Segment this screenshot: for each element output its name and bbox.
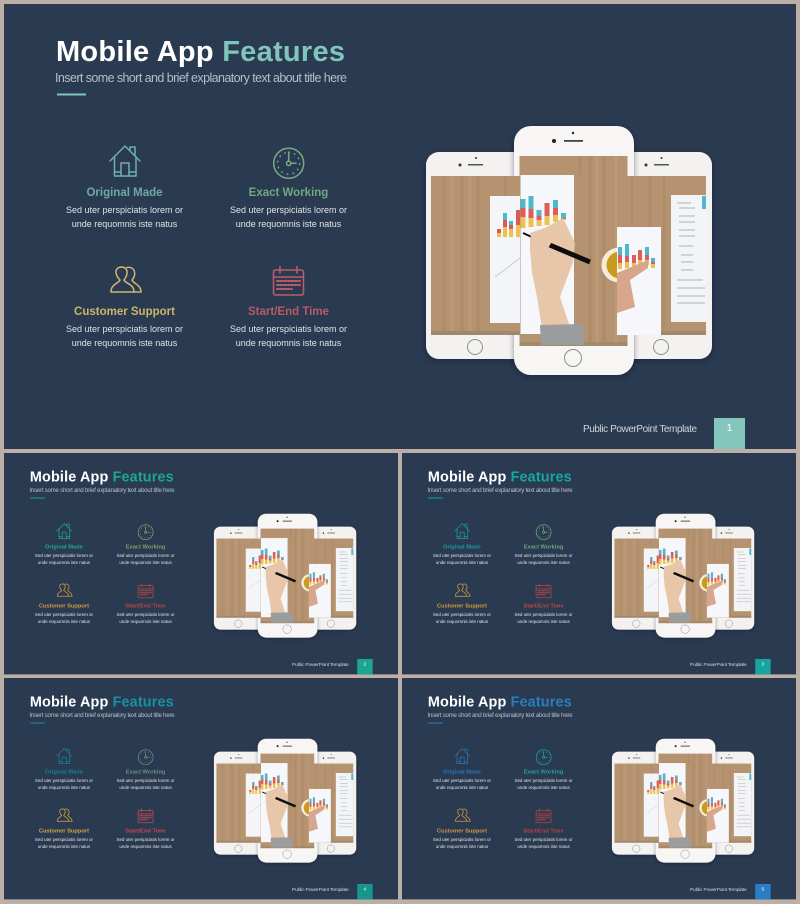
heading: Customer Support xyxy=(74,306,175,318)
description: Sed uter perspiciatis lorem or xyxy=(514,778,573,783)
feature: Start/End Time xyxy=(230,266,347,348)
icon: clock xyxy=(138,750,153,765)
slide 2 xyxy=(4,453,398,674)
page number badge: 4 xyxy=(364,886,367,892)
phone mockups xyxy=(612,514,754,638)
description: Sed uter perspiciatis lorem or xyxy=(116,837,175,842)
feature: Start/End Time xyxy=(514,584,573,624)
heading: Original Made xyxy=(86,187,163,199)
slide 1: main slide xyxy=(4,4,796,449)
footer label: Public PowerPoint Template xyxy=(292,662,349,668)
icon: clock xyxy=(536,525,551,540)
heading: Start/End Time xyxy=(248,306,329,318)
title underline xyxy=(30,722,45,725)
heading: Exact Working xyxy=(249,187,328,199)
description: Sed uter perspiciatis lorem or xyxy=(116,778,175,783)
feature: Original Made xyxy=(35,749,94,790)
description: Sed uter perspiciatis lorem or xyxy=(433,837,492,842)
page number badge xyxy=(755,884,771,899)
description: Sed uter perspiciatis lorem or xyxy=(230,205,347,215)
icon: people xyxy=(111,267,141,292)
description: Sed uter perspiciatis lorem or xyxy=(230,324,347,334)
description: Sed uter perspiciatis lorem or xyxy=(66,324,183,334)
description: unde requomnis iste natus xyxy=(236,219,342,229)
description: unde requomnis iste natus xyxy=(38,785,91,790)
icon: house xyxy=(57,524,72,539)
page number badge xyxy=(755,659,771,674)
heading: Customer Support xyxy=(437,604,487,610)
heading: Original Made xyxy=(45,545,83,551)
description: unde requomnis iste natus xyxy=(517,560,571,565)
description: Sed uter perspiciatis lorem or xyxy=(35,837,94,842)
feature: Customer Support xyxy=(433,584,492,624)
icon: clock xyxy=(536,750,551,765)
heading: Start/End Time xyxy=(125,829,166,835)
feature: Exact Working xyxy=(230,148,347,229)
footer label: Public PowerPoint Template xyxy=(292,887,349,893)
footer label: Public PowerPoint Template xyxy=(583,424,697,435)
description: Sed uter perspiciatis lorem or xyxy=(514,553,573,558)
description: unde requomnis iste natus xyxy=(436,619,489,624)
heading: Exact Working xyxy=(126,770,166,776)
feature: Customer Support xyxy=(66,267,183,348)
title: Mobile App Features xyxy=(428,694,572,710)
icon: people xyxy=(455,809,470,821)
page number badge xyxy=(714,418,745,449)
description: Sed uter perspiciatis lorem or xyxy=(514,612,573,617)
title underline xyxy=(428,497,443,500)
heading: Customer Support xyxy=(39,829,89,835)
icon: people xyxy=(455,584,470,596)
subtitle: Insert some short and brief explanatory text about title here xyxy=(427,712,573,719)
description: Sed uter perspiciatis lorem or xyxy=(66,205,183,215)
description: unde requomnis iste natus xyxy=(72,219,178,229)
heading: Start/End Time xyxy=(523,829,564,835)
page number badge: 2 xyxy=(364,661,367,667)
heading: Exact Working xyxy=(126,545,166,551)
feature: Exact Working xyxy=(116,525,175,565)
subtitle: Insert some short and brief explanatory text about title here xyxy=(55,71,347,85)
heading: Original Made xyxy=(45,770,83,776)
description: unde requomnis iste natus xyxy=(436,560,489,565)
feature: Start/End Time xyxy=(116,809,175,849)
title underline xyxy=(57,94,86,96)
icon: house xyxy=(455,524,470,539)
description: unde requomnis iste natus xyxy=(236,338,342,348)
phone mockups xyxy=(214,739,356,863)
feature: Start/End Time xyxy=(514,809,573,849)
icon: calendar xyxy=(274,266,304,295)
icon: clock xyxy=(274,148,304,178)
heading: Original Made xyxy=(443,545,481,551)
heading: Exact Working xyxy=(524,545,564,551)
description: unde requomnis iste natus xyxy=(119,619,173,624)
description: unde requomnis iste natus xyxy=(436,785,489,790)
subtitle: Insert some short and brief explanatory text about title here xyxy=(29,487,175,494)
icon: people xyxy=(57,584,72,596)
description: unde requomnis iste natus xyxy=(119,560,173,565)
footer label: Public PowerPoint Template xyxy=(690,887,747,893)
page number badge: 5 xyxy=(762,886,765,892)
icon: calendar xyxy=(536,584,551,598)
description: unde requomnis iste natus xyxy=(38,619,91,624)
title: Mobile App Features xyxy=(30,694,174,710)
page number badge: 3 xyxy=(762,661,765,667)
heading: Customer Support xyxy=(39,604,89,610)
feature: Start/End Time xyxy=(116,584,175,624)
description: unde requomnis iste natus xyxy=(517,844,571,849)
heading: Original Made xyxy=(443,770,481,776)
page number badge: 1 xyxy=(727,423,733,434)
heading: Customer Support xyxy=(437,829,487,835)
description: unde requomnis iste natus xyxy=(436,844,489,849)
feature: Exact Working xyxy=(514,750,573,790)
description: Sed uter perspiciatis lorem or xyxy=(433,553,492,558)
description: Sed uter perspiciatis lorem or xyxy=(35,778,94,783)
heading: Exact Working xyxy=(524,770,564,776)
description: Sed uter perspiciatis lorem or xyxy=(433,612,492,617)
icon: calendar xyxy=(138,584,153,598)
description: Sed uter perspiciatis lorem or xyxy=(35,553,94,558)
feature: Original Made xyxy=(433,524,492,565)
description: unde requomnis iste natus xyxy=(119,844,173,849)
phone mockups xyxy=(612,739,754,863)
page number badge xyxy=(357,884,373,899)
feature: Original Made xyxy=(433,749,492,790)
icon: calendar xyxy=(536,809,551,823)
description: Sed uter perspiciatis lorem or xyxy=(433,778,492,783)
title: Mobile App Features xyxy=(56,36,345,68)
description: unde requomnis iste natus xyxy=(119,785,173,790)
feature: Exact Working xyxy=(514,525,573,565)
icon: house xyxy=(110,146,140,176)
heading: Start/End Time xyxy=(523,604,564,610)
description: Sed uter perspiciatis lorem or xyxy=(514,837,573,842)
title underline xyxy=(30,497,45,500)
subtitle: Insert some short and brief explanatory text about title here xyxy=(427,487,573,494)
description: unde requomnis iste natus xyxy=(517,785,571,790)
title underline xyxy=(428,722,443,725)
icon: house xyxy=(57,749,72,764)
feature: Customer Support xyxy=(35,584,94,624)
feature: Original Made xyxy=(66,146,183,229)
icon: calendar xyxy=(138,809,153,823)
description: unde requomnis iste natus xyxy=(38,560,91,565)
icon: house xyxy=(455,749,470,764)
heading: Start/End Time xyxy=(125,604,166,610)
phone mockups xyxy=(214,514,356,638)
feature: Customer Support xyxy=(35,809,94,849)
slide 4 xyxy=(4,678,398,899)
description: Sed uter perspiciatis lorem or xyxy=(116,553,175,558)
description: unde requomnis iste natus xyxy=(72,338,178,348)
slide 5 xyxy=(402,678,796,899)
slide 3 xyxy=(402,453,796,674)
feature: Exact Working xyxy=(116,750,175,790)
description: unde requomnis iste natus xyxy=(38,844,91,849)
phone mockups xyxy=(426,126,712,375)
feature: Original Made xyxy=(35,524,94,565)
description: unde requomnis iste natus xyxy=(517,619,571,624)
footer label: Public PowerPoint Template xyxy=(690,662,747,668)
description: Sed uter perspiciatis lorem or xyxy=(116,612,175,617)
title: Mobile App Features xyxy=(30,469,174,485)
icon: people xyxy=(57,809,72,821)
subtitle: Insert some short and brief explanatory text about title here xyxy=(29,712,175,719)
feature: Customer Support xyxy=(433,809,492,849)
page number badge xyxy=(357,659,373,674)
title: Mobile App Features xyxy=(428,469,572,485)
icon: clock xyxy=(138,525,153,540)
description: Sed uter perspiciatis lorem or xyxy=(35,612,94,617)
